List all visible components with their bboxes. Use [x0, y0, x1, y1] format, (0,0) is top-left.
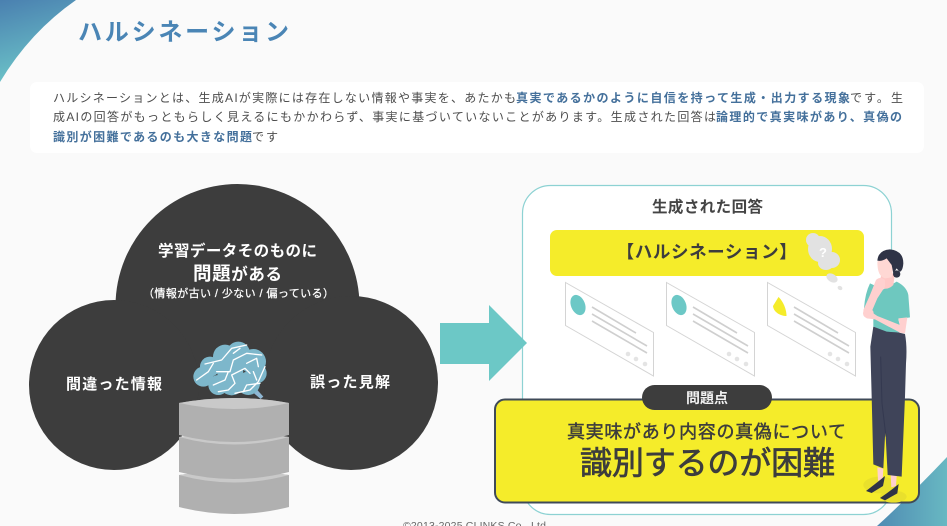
icon: brain [193, 342, 267, 399]
label: problem: 問題点 [686, 390, 728, 406]
text: wrong opinion: 誤った見解 [310, 374, 390, 391]
text: problem line 2: 識別するのが困難 [580, 445, 835, 481]
icon: thought bubble [806, 233, 843, 291]
banner: hallucination [550, 230, 864, 276]
text: data problem: （情報が古い / 少ない / 偏っている） [143, 286, 334, 300]
diagram: causes of hallucination [29, 184, 438, 514]
decoration: bottom-right corner [877, 457, 947, 526]
circle: wrong opinion [264, 296, 438, 470]
panel: generated answers [522, 186, 892, 514]
panel: description [30, 82, 924, 153]
callout: problem [495, 385, 919, 502]
description line 3: です [252, 130, 278, 144]
title: ハルシネーション [78, 19, 289, 46]
icon: thought bubble: ? [819, 245, 827, 260]
description line 2: 成AIの回答がもっともらしく見えるにもかかわらず、事実に基づいていないことがあります。生成された回答は [53, 109, 716, 124]
text: data problem [143, 241, 334, 300]
card: answer 1 [566, 282, 654, 376]
card: answer 2 [666, 282, 754, 376]
circle: wrong information [29, 300, 199, 470]
card: answer 3 [768, 282, 856, 376]
description line 1 [53, 90, 903, 105]
decoration: top-left corner [0, 0, 76, 82]
circle: data problem [116, 184, 360, 428]
description line 1: 真実であるかのように自信を持って生成・出力する現象 [516, 90, 850, 105]
text: data problem: 問題がある [193, 263, 282, 284]
description line 3: 識別が困難であるのも大きな問題 [53, 129, 252, 144]
text: data problem: 学習データそのものに [158, 241, 317, 260]
arrow [440, 305, 527, 381]
banner: hallucination: 【ハルシネーション】 [617, 242, 797, 262]
text: wrong information: 間違った情報 [66, 375, 162, 393]
icon: database [179, 398, 289, 514]
icon: thinking woman [863, 249, 910, 503]
description line 1: です。生 [850, 91, 903, 105]
description line 1: ハルシネーションとは、生成AIが実際には存在しない情報や事実を、あたかも [53, 90, 516, 105]
heading: generated answers: 生成された回答 [652, 197, 763, 216]
description line 2: 論理的で真実味があり、真偽の [716, 109, 902, 124]
text: problem line 1: 真実味があり内容の真偽について [567, 422, 846, 442]
label: problem [642, 385, 772, 410]
